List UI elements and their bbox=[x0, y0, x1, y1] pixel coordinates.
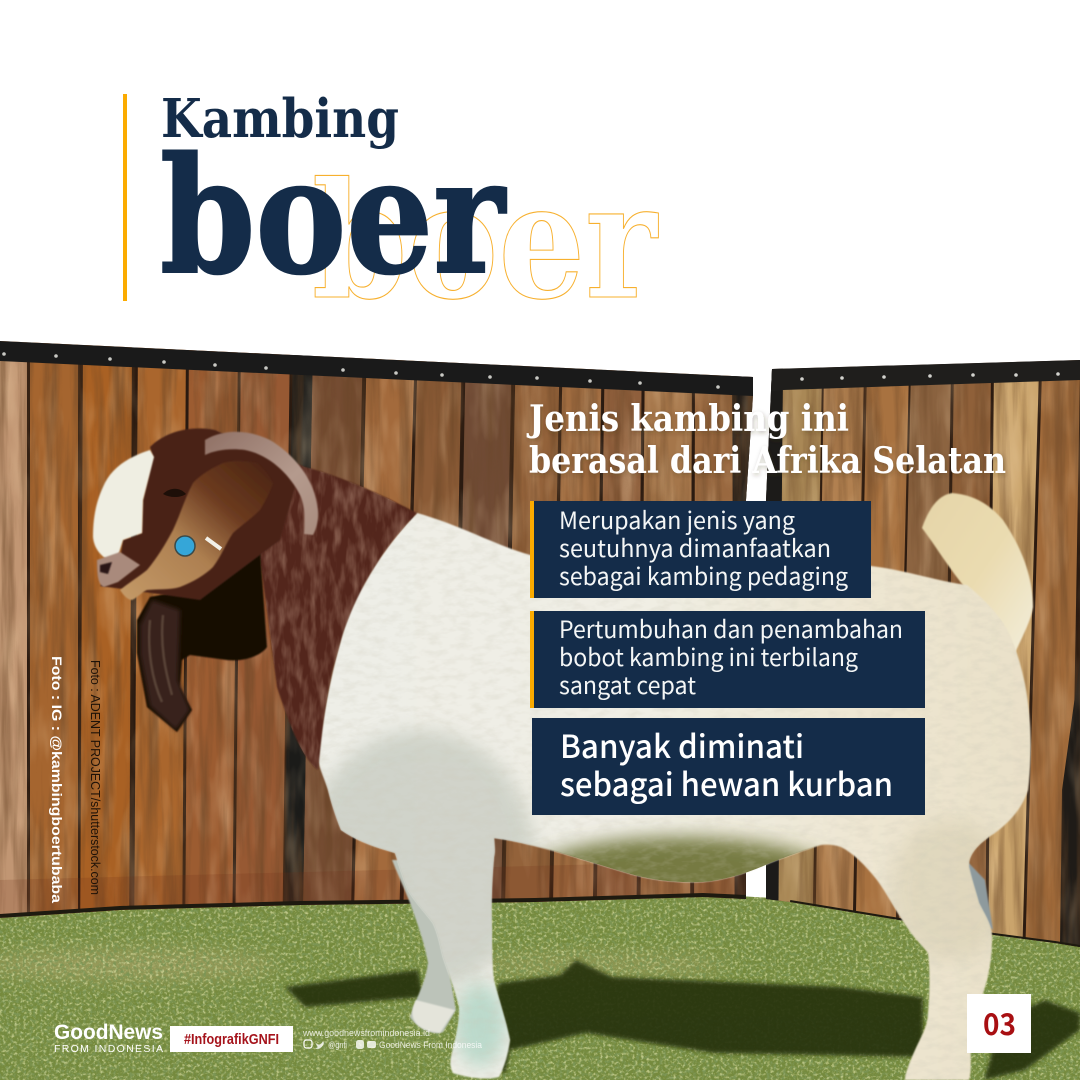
panel: sacrificial animal: Banyak diminati bbox=[560, 722, 804, 768]
photo: wooden fence right bbox=[760, 355, 1080, 960]
goat muzzle bbox=[97, 552, 140, 587]
logo: GoodNews from Indonesia bbox=[54, 1021, 163, 1055]
panel: fast growth: bobot kambing ini terbilang bbox=[559, 638, 858, 673]
panel: fast growth: sangat cepat bbox=[559, 666, 696, 701]
title small word: Kambing bbox=[161, 88, 399, 150]
heading: Jenis kambing ini bbox=[526, 398, 849, 440]
goat illustration bbox=[93, 428, 1040, 1080]
panel: meat goat: sebagai kambing pedaging bbox=[559, 557, 848, 592]
goat horn bbox=[205, 432, 318, 535]
goat white blaze bbox=[93, 450, 154, 560]
icon: youtube bbox=[367, 1041, 376, 1048]
icon: twitter bbox=[315, 1041, 324, 1049]
panel: meat goat bbox=[530, 501, 871, 598]
panel: sacrificial animal: sebagai hewan kurban bbox=[560, 760, 893, 806]
heading bbox=[526, 398, 1006, 482]
goat ear tag white bbox=[206, 538, 221, 549]
heading: berasal dari Afrika Selatan bbox=[529, 440, 1006, 482]
photo credit dark: Foto : ADENT PROJECT/shutterstock.com bbox=[88, 660, 103, 895]
goat tail bbox=[922, 493, 1033, 660]
goat far front leg bbox=[392, 860, 456, 1033]
photo credit white: Foto : IG : @kambingboertubaba bbox=[49, 656, 65, 903]
title big word: boer bbox=[160, 122, 506, 310]
goat shadow bbox=[285, 960, 1080, 1080]
photo: grass lawn bbox=[0, 895, 1080, 1080]
goat body shading bbox=[305, 500, 1040, 1080]
fence top rail right bbox=[766, 360, 1080, 392]
page number bbox=[967, 994, 1031, 1053]
goat neck fur texture bbox=[261, 466, 408, 770]
hashtag badge: #InfografikGNFI bbox=[184, 1032, 279, 1048]
panel: fast growth: Pertumbuhan dan penambahan bbox=[559, 610, 903, 645]
goat head bbox=[100, 428, 300, 600]
photo: wooden fence left bbox=[0, 340, 760, 960]
icon: facebook bbox=[356, 1040, 364, 1049]
page number: 03 bbox=[983, 1000, 1016, 1044]
goat body bbox=[318, 513, 1031, 1080]
logo: GoodNews from Indonesia: FROM INDONESIA bbox=[54, 1043, 163, 1055]
panel: meat goat: Merupakan jenis yang bbox=[559, 501, 795, 536]
panel: fast growth bbox=[530, 610, 925, 708]
title bbox=[160, 88, 658, 335]
goat ear tag blue bbox=[175, 536, 195, 556]
website and social links: www.goodnewsfromindonesia.id bbox=[302, 1028, 430, 1038]
website and social links: GoodNews From Indonesia bbox=[379, 1040, 482, 1050]
title accent bar bbox=[123, 94, 127, 301]
logo: GoodNews from Indonesia: GoodNews bbox=[54, 1021, 163, 1044]
hashtag badge bbox=[170, 1026, 293, 1052]
goat throat and beard bbox=[137, 505, 267, 732]
website and social links: @gnfi bbox=[328, 1040, 347, 1050]
title outline word: boer bbox=[312, 147, 658, 335]
goat ear bbox=[120, 461, 273, 600]
panel: sacrificial animal bbox=[532, 718, 925, 815]
website and social links bbox=[302, 1028, 482, 1050]
goat far rear leg bbox=[966, 860, 993, 930]
goat eye bbox=[163, 489, 186, 497]
fence top rail left bbox=[0, 341, 753, 396]
panel: meat goat: seutuhnya dimanfaatkan bbox=[559, 529, 831, 564]
goat neck bbox=[255, 455, 417, 770]
icon: instagram bbox=[304, 1040, 312, 1048]
